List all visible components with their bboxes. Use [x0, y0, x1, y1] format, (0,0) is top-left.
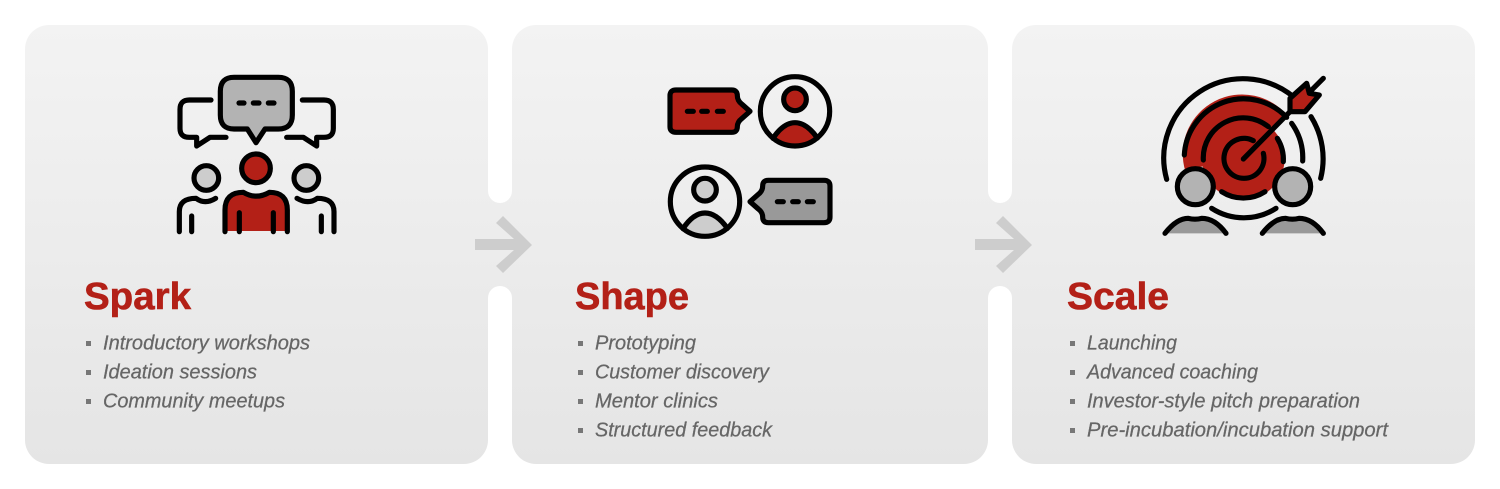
heading: Scale: Scale [1067, 276, 1169, 318]
list: Shape activities: Mentor clinics [595, 390, 718, 412]
list: Shape activities: Structured feedback [595, 420, 773, 442]
list: Shape activities [578, 332, 773, 442]
list: Spark activities [86, 332, 310, 412]
list: Scale activities: Advanced coaching [1086, 362, 1258, 384]
list: Scale activities: Pre-incubation/incubation support [1087, 420, 1389, 442]
list: Shape activities: Customer discovery [595, 362, 770, 384]
icon: group conversation [179, 77, 334, 232]
list: Spark activities: Ideation sessions [103, 362, 257, 384]
heading: Spark: Spark [84, 276, 192, 318]
heading: Shape: Shape [575, 276, 689, 318]
list: Spark activities: Introductory workshops [103, 332, 310, 354]
panel: Scale [1067, 78, 1389, 441]
list: Scale activities: Investor-style pitch preparation [1087, 390, 1360, 412]
icon: two people exchanging messages [670, 77, 830, 237]
list: Shape activities: Prototyping [595, 332, 696, 354]
list: Scale activities: Launching [1087, 332, 1177, 354]
list: Scale activities [1070, 332, 1389, 442]
panel: Spark [84, 77, 334, 412]
panel: Shape [575, 77, 830, 442]
list: Spark activities: Community meetups [103, 390, 285, 412]
arrow: Spark to Shape [475, 216, 532, 273]
arrow: Shape to Scale [975, 216, 1032, 273]
icon: target with arrow and two people [1164, 78, 1323, 233]
